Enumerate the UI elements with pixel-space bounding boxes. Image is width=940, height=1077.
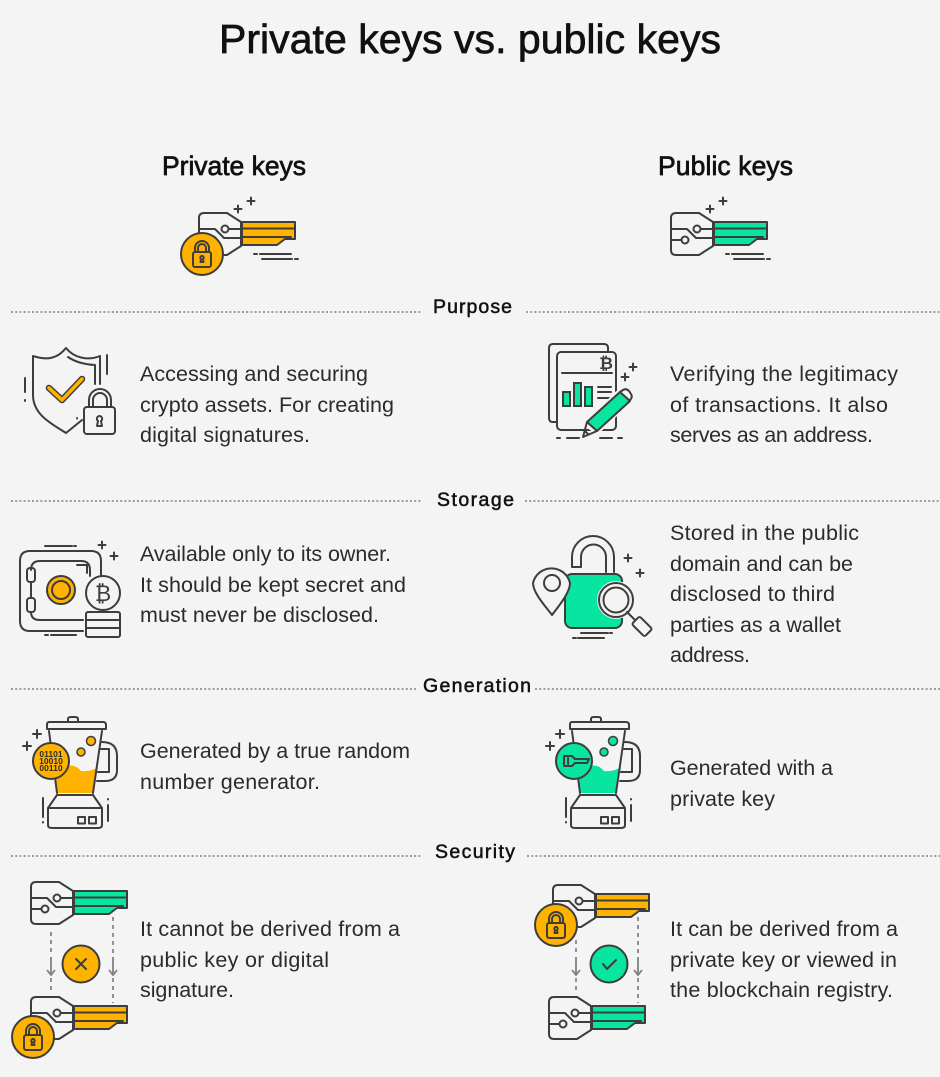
text: purpose public [670, 362, 898, 447]
text: purpose private: Accessing and securing [140, 362, 368, 386]
text: purpose public: serves as an address. [670, 423, 873, 447]
text: security private: It cannot be derived from a [140, 917, 400, 941]
icon: blender with key [546, 717, 640, 828]
text: storage public: disclosed to third [670, 582, 835, 606]
icon: private key [181, 198, 298, 275]
text: purpose public: of transactions. It also [670, 393, 888, 417]
title: Private keys vs. public keys [219, 16, 721, 62]
panel: security private [12, 882, 400, 1058]
icon: safe with coin [20, 542, 120, 637]
text: generation private: Generated by a true random [140, 739, 410, 763]
text: storage private [140, 542, 406, 627]
text: security public: the blockchain registry. [670, 978, 893, 1002]
text: generation public: private key [670, 787, 775, 811]
text: generation private: number generator. [140, 770, 320, 794]
text: purpose private [140, 362, 394, 447]
icon: document with pencil [549, 344, 636, 438]
panel: purpose public [549, 344, 898, 447]
text: security public [670, 917, 898, 1002]
icon: blender with binary [23, 717, 117, 828]
panel: generation public [546, 717, 833, 828]
text: security private: signature. [140, 978, 234, 1002]
panel: storage public [533, 521, 859, 667]
icon: blender with binary: 00110 [39, 763, 63, 773]
text: storage public: domain and can be [670, 552, 853, 576]
section label: storage: Storage [437, 489, 514, 511]
text: storage public: Stored in the public [670, 521, 859, 545]
text: storage private: Available only to its owner. [140, 542, 391, 566]
icon: document with pencil: ₿ [599, 354, 613, 373]
section label: security: Security [435, 841, 515, 863]
text: security private [140, 917, 400, 1002]
text: generation public [670, 756, 833, 811]
icon: safe with coin: ₿ [95, 581, 111, 606]
text: purpose private: crypto assets. For creating [140, 393, 394, 417]
icon: blender with binary: 01101 [39, 749, 63, 759]
text: purpose public: Verifying the legitimacy [670, 362, 898, 386]
panel: purpose private [25, 348, 394, 447]
text: purpose private: digital signatures. [140, 423, 310, 447]
text: security public: private key or viewed in [670, 948, 897, 972]
panel: generation private [23, 717, 410, 828]
section label: purpose: Purpose [433, 296, 512, 318]
icon: open padlock with pin and magnifier [533, 536, 652, 638]
icon: private key derives public key [535, 885, 649, 1039]
panel: security public [535, 885, 898, 1039]
heading: public keys: Public keys [658, 151, 793, 181]
icon: blender with binary: 10010 [39, 756, 63, 766]
heading: private keys: Private keys [162, 151, 306, 181]
icon: public key [671, 198, 770, 259]
panel: storage private [20, 542, 406, 637]
text: storage public [670, 521, 859, 667]
text: security private: public key or digital [140, 948, 329, 972]
icon: public key cannot derive private key [12, 882, 127, 1058]
text: storage public: parties as a wallet [670, 613, 841, 637]
text: generation public: Generated with a [670, 756, 833, 780]
text: storage private: must never be disclosed. [140, 603, 379, 627]
text: storage private: It should be kept secret and [140, 573, 406, 597]
icon: shield with lock [25, 348, 115, 434]
text: storage public: address. [670, 643, 750, 667]
section label: generation: Generation [423, 675, 531, 697]
text: generation private [140, 739, 410, 794]
text: security public: It can be derived from a [670, 917, 898, 941]
